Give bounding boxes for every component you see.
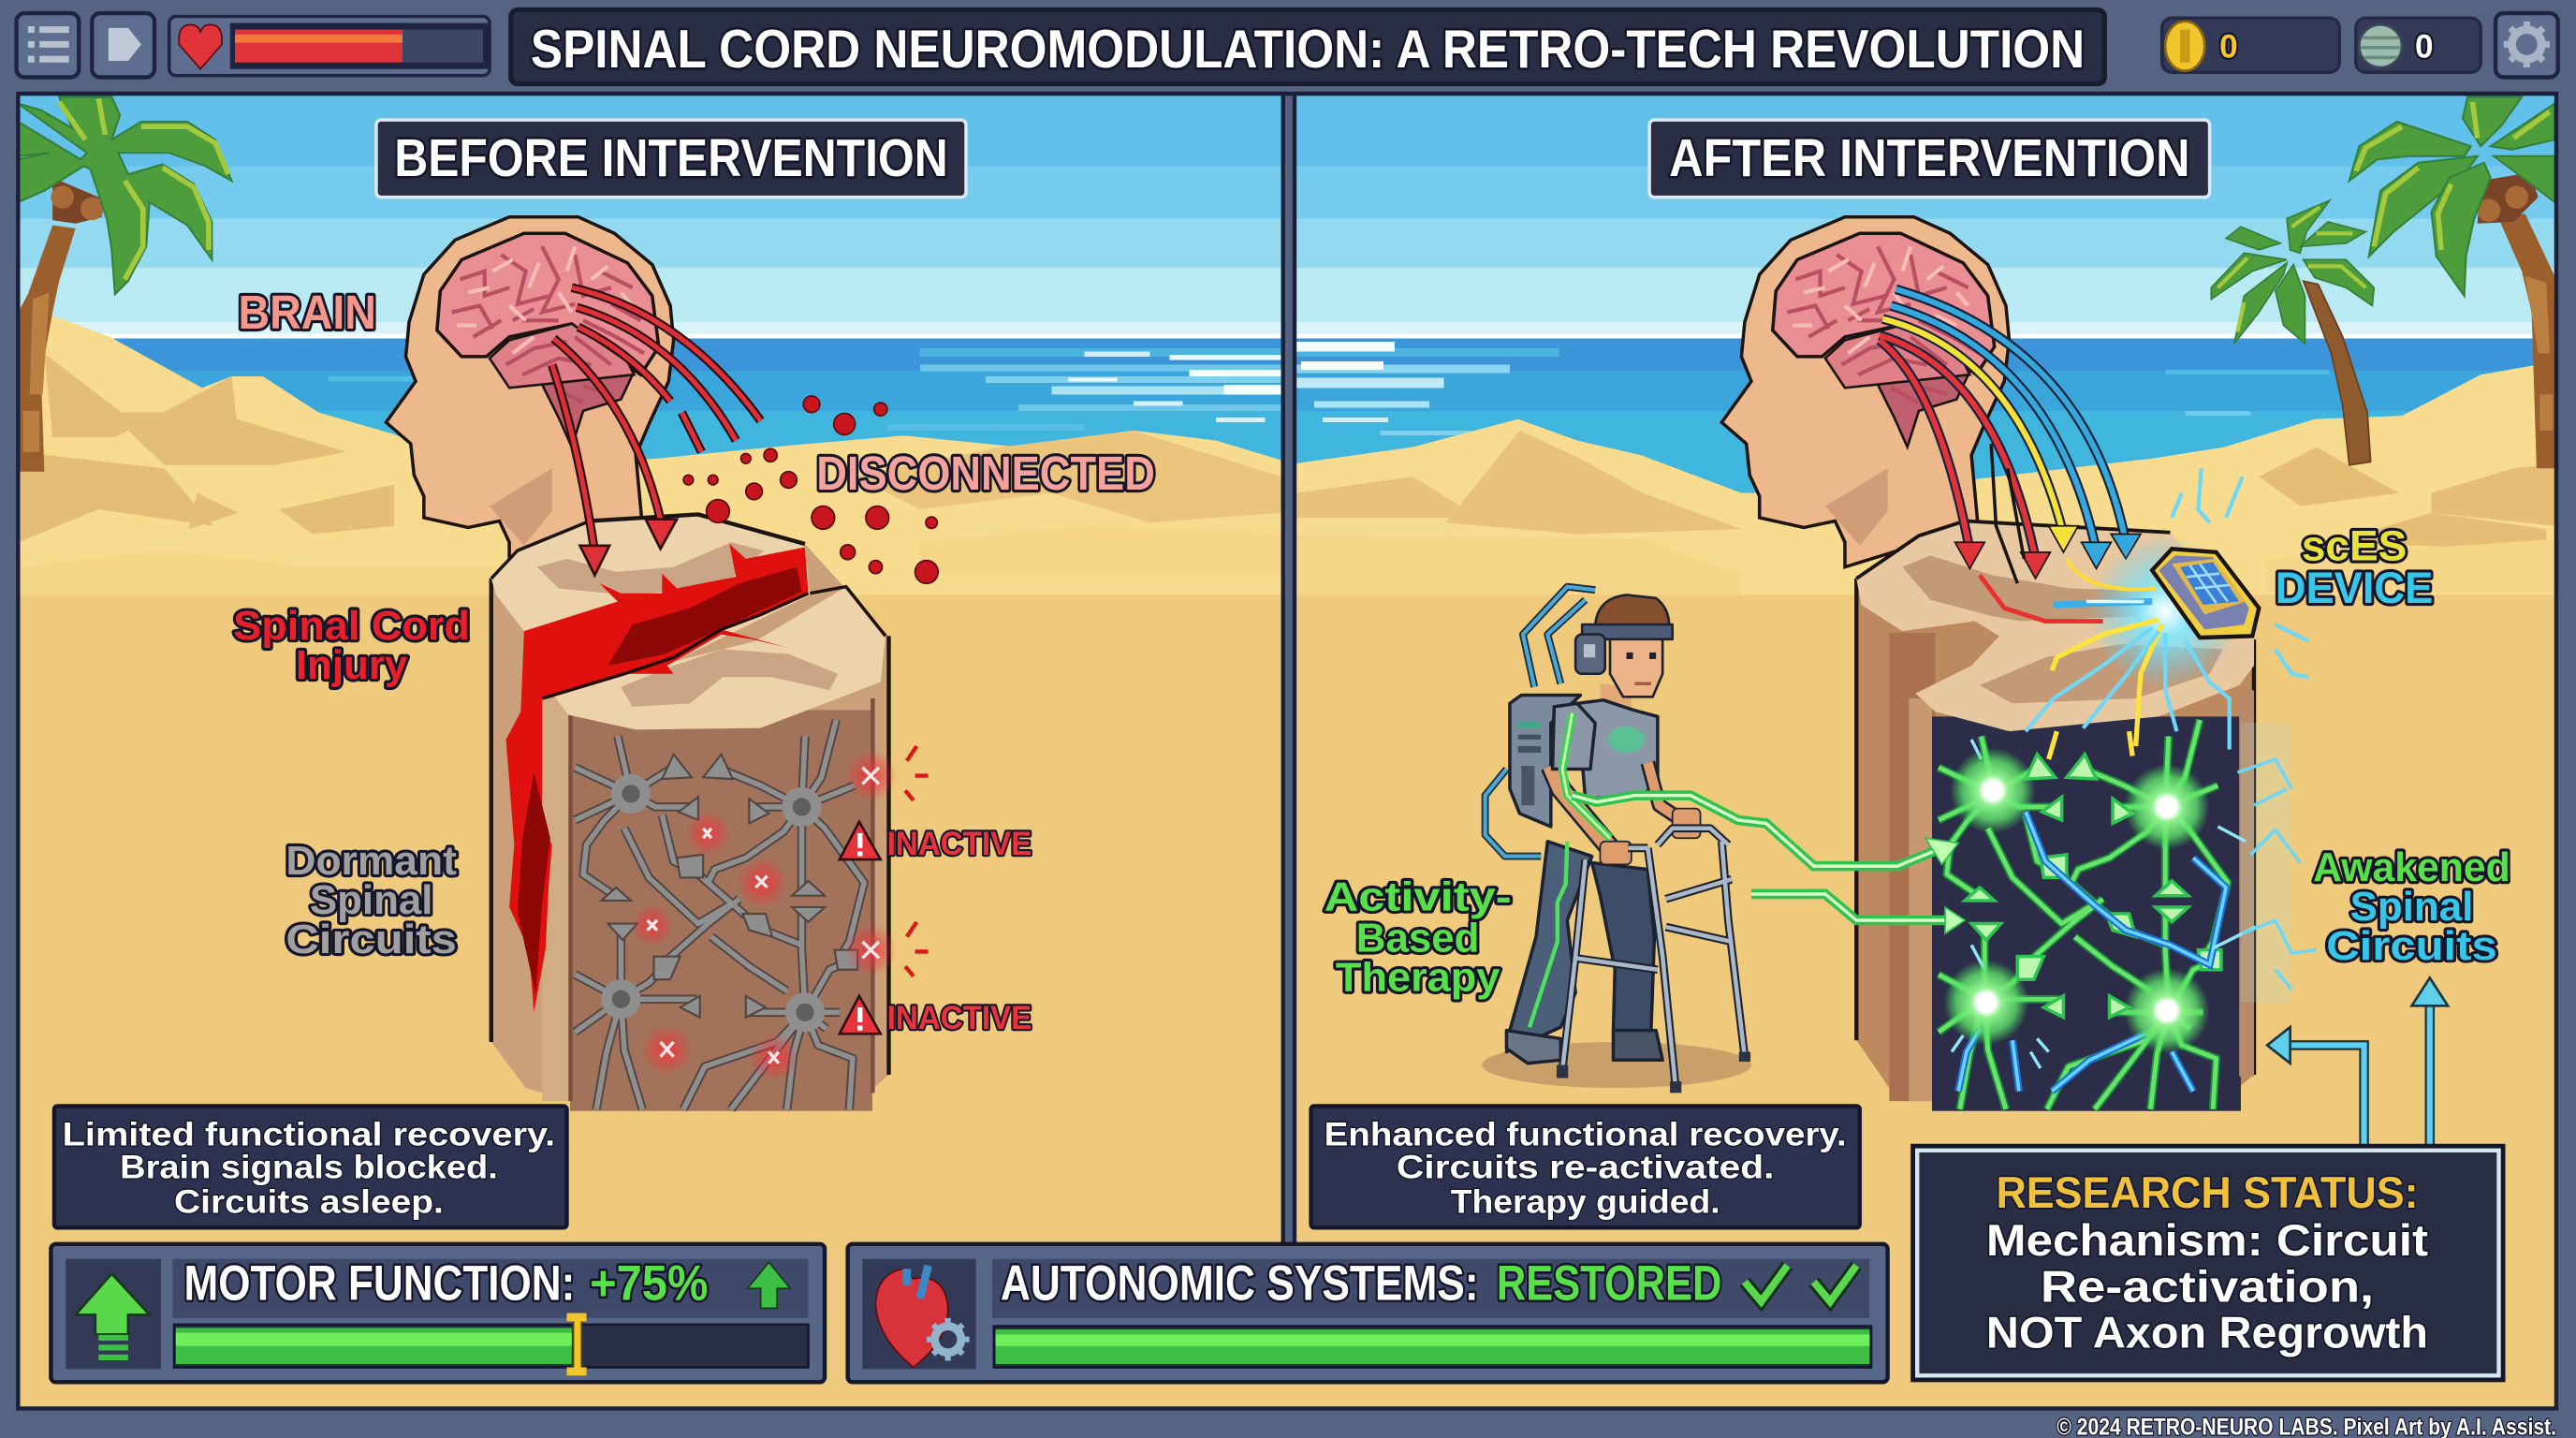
autonomic systems bar: AUTONOMIC SYSTEMS:: [1001, 1256, 1479, 1312]
patient shadow: [1482, 1042, 1751, 1088]
icon: check marks: [1745, 1266, 1856, 1301]
heading: before intervention: [376, 120, 966, 198]
walker: [1562, 829, 1745, 1093]
head and brain: [1721, 217, 2009, 567]
text block: after summary: Enhanced functional recovery.: [1325, 1117, 1847, 1153]
autonomic systems bar: RESTORED: [1497, 1256, 1721, 1312]
label: awakened spinal circuits: Circuits: [2326, 923, 2497, 969]
awakened neural circuits: [1939, 720, 2317, 1109]
face: [1610, 638, 1662, 697]
text block: after summary: Therapy guided.: [1451, 1184, 1720, 1221]
spinal cord: awakened: [1856, 521, 2254, 1111]
gem counter: [2356, 18, 2481, 72]
head and brain: [386, 217, 674, 567]
top HUD: [17, 10, 2558, 84]
settings button: [2496, 13, 2558, 78]
coin counter: [2162, 18, 2339, 72]
label: scES device: DEVICE: [2276, 564, 2433, 613]
label: inactive lower: [840, 996, 1032, 1036]
far arm: [1647, 763, 1684, 822]
research status: [1914, 1147, 2502, 1379]
health bar: [169, 17, 490, 76]
label: activity-based therapy: Based: [1356, 915, 1479, 961]
label: inactive upper: INACTIVE: [887, 826, 1032, 862]
signal arrows: restored: [1880, 289, 2141, 583]
label: dormant spinal circuits: [285, 838, 457, 962]
label: inactive upper: [840, 822, 1032, 862]
play button: [92, 13, 154, 78]
spinal cord: injured: [491, 514, 889, 1111]
callout arrows: [2267, 977, 2448, 1151]
research status: NOT Axon Regrowth: [1986, 1308, 2428, 1357]
label: disconnected: DISCONNECTED: [816, 447, 1155, 500]
dunes: [1296, 365, 2556, 822]
near arm: [1551, 766, 1610, 848]
text block: before summary: Brain signals blocked.: [120, 1150, 498, 1186]
label: activity-based therapy: Therapy: [1336, 955, 1500, 1001]
disconnect fragments: [683, 396, 938, 583]
sea: [112, 339, 1281, 461]
dunes: [21, 315, 1281, 595]
research status: RESEARCH STATUS:: [1996, 1168, 2419, 1218]
inactive red glows: [631, 746, 929, 1081]
torso: [1577, 700, 1658, 799]
text block: before summary: Circuits asleep.: [174, 1184, 444, 1221]
injury wound: [506, 544, 809, 1012]
icon: up arrow: [76, 1273, 150, 1357]
label: activity-based therapy: Activity-: [1325, 874, 1512, 920]
headset: [1582, 624, 1673, 639]
heading: after intervention: AFTER INTERVENTION: [1669, 128, 2190, 187]
scES device sparks: [1980, 468, 2308, 759]
palm tree large: [2349, 97, 2556, 468]
label: activity-based therapy: [1325, 874, 1512, 1001]
sky: [1296, 94, 2556, 339]
motor function bar: +75%: [590, 1256, 708, 1312]
label: dormant spinal circuits: Circuits: [285, 917, 457, 962]
label: scES device: scES: [2302, 522, 2407, 570]
backpack: [1510, 696, 1580, 827]
text block: before summary: [54, 1106, 567, 1227]
gem counter: 0: [2415, 28, 2434, 65]
far leg: [1592, 863, 1654, 1031]
sea: [1296, 339, 2556, 493]
slider knob: [567, 1313, 587, 1375]
sky: [18, 94, 1281, 339]
label: inactive lower: INACTIVE: [887, 1000, 1032, 1036]
label: spinal cord injury: Spinal Cord: [233, 603, 470, 649]
label: spinal cord injury: [233, 603, 470, 688]
label: scES device: [2276, 522, 2433, 613]
near leg: [1506, 842, 1592, 1051]
panel: before intervention: [18, 94, 1281, 1414]
dormant neural circuits: [575, 720, 864, 1109]
motor function bar: MOTOR FUNCTION:: [184, 1256, 575, 1312]
panel: after intervention: [1296, 94, 2556, 1416]
autonomic systems bar: [848, 1244, 1888, 1382]
palm tree left: [18, 97, 231, 472]
backpack wires: [1486, 587, 1595, 857]
signal arrows: blocked: [552, 287, 761, 575]
label: dormant spinal circuits: Spinal: [310, 877, 432, 923]
heading: after intervention: [1649, 120, 2210, 198]
therapy signal arrows: [1573, 796, 1965, 933]
label: awakened spinal circuits: [2313, 844, 2510, 969]
label: spinal cord injury: Injury: [296, 642, 408, 688]
palm tree small: [2211, 200, 2374, 465]
lower sand strip under divider: [1280, 1242, 1298, 1408]
patient with walker: [1486, 587, 1745, 1093]
research status: Re-activation,: [2041, 1262, 2374, 1312]
label: awakened spinal circuits: Spinal: [2350, 884, 2473, 930]
menu button: [17, 13, 79, 78]
label: awakened spinal circuits: Awakened: [2313, 844, 2510, 890]
icon: small arrow: [748, 1262, 790, 1308]
motor function bar: [51, 1244, 825, 1382]
hair: [1595, 594, 1669, 626]
text block: after summary: [1311, 1106, 1860, 1227]
text block: after summary: Circuits re-activated.: [1397, 1150, 1775, 1186]
icon: heart and gear: [875, 1266, 970, 1368]
scES device: [2152, 549, 2259, 638]
research status: Mechanism: Circuit: [1986, 1216, 2428, 1266]
icon: heart: [179, 24, 222, 69]
neck: [1600, 683, 1632, 713]
coin counter: 0: [2219, 28, 2238, 65]
heading: before intervention: BEFORE INTERVENTION: [394, 128, 948, 187]
label: dormant spinal circuits: Dormant: [285, 838, 457, 884]
label: brain: BRAIN: [238, 286, 376, 339]
text block: before summary: Limited functional recovery.: [63, 1117, 555, 1153]
title bar: SPINAL CORD NEUROMODULATION: A RETRO-TECH REVOLUTION: [531, 20, 2085, 80]
